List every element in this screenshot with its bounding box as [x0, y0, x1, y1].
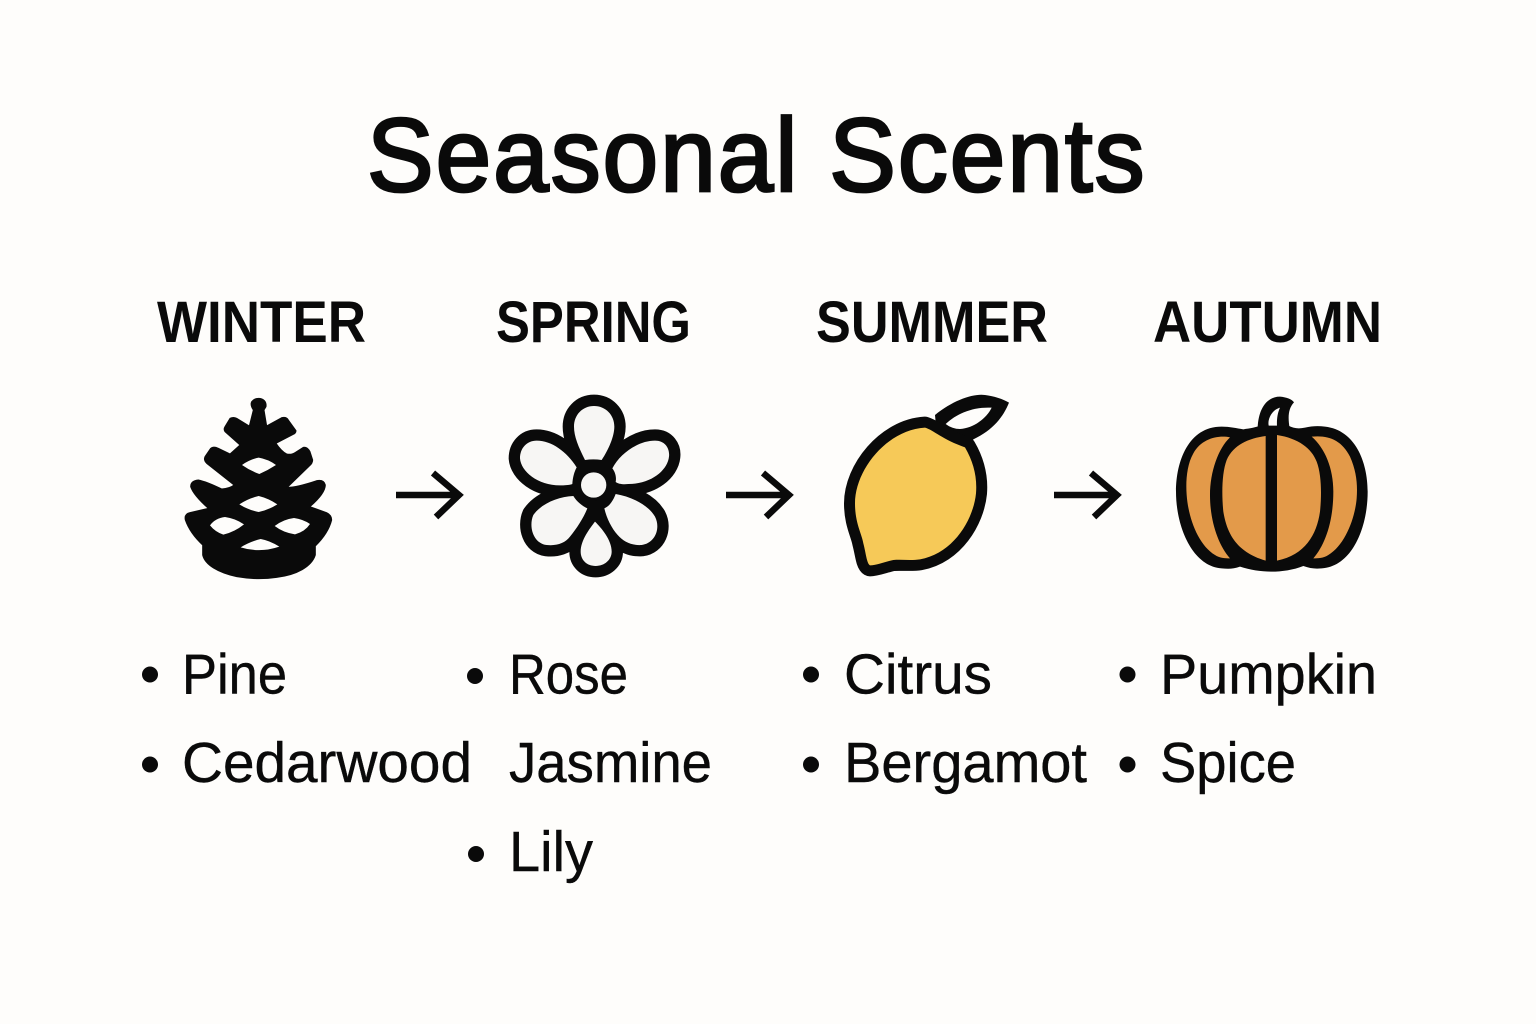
list: autumn scents: [1120, 642, 1377, 795]
list: summer scents: Citrus: [844, 642, 992, 706]
icon: pumpkin: [1176, 397, 1368, 572]
list: summer scents: [803, 642, 1087, 795]
heading: summer: SUMMER: [816, 290, 1048, 355]
list: summer scents: Bergamot: [844, 731, 1087, 795]
icon: pine cone: [185, 398, 332, 579]
arrow: winter to spring: [396, 473, 459, 517]
list: spring scents: Lily: [509, 820, 593, 884]
list: spring scents: [467, 642, 712, 884]
icon: lemon: [855, 395, 1009, 565]
list: autumn scents: Pumpkin: [1160, 642, 1377, 706]
list: spring scents: Rose: [509, 642, 628, 706]
icon: flower: [520, 406, 669, 566]
list: autumn scents: Spice: [1160, 731, 1296, 795]
arrow: spring to summer: [726, 473, 789, 517]
heading: winter: WINTER: [157, 290, 366, 355]
list: winter scents: Cedarwood: [182, 731, 472, 795]
list: winter scents: Pine: [182, 642, 287, 706]
arrow: summer to autumn: [1054, 473, 1117, 517]
heading: spring: SPRING: [496, 290, 691, 355]
title: Seasonal Scents: [367, 97, 1145, 213]
heading: autumn: AUTUMN: [1153, 290, 1382, 355]
list: winter scents: [142, 642, 472, 795]
list: spring scents: Jasmine: [509, 731, 712, 795]
